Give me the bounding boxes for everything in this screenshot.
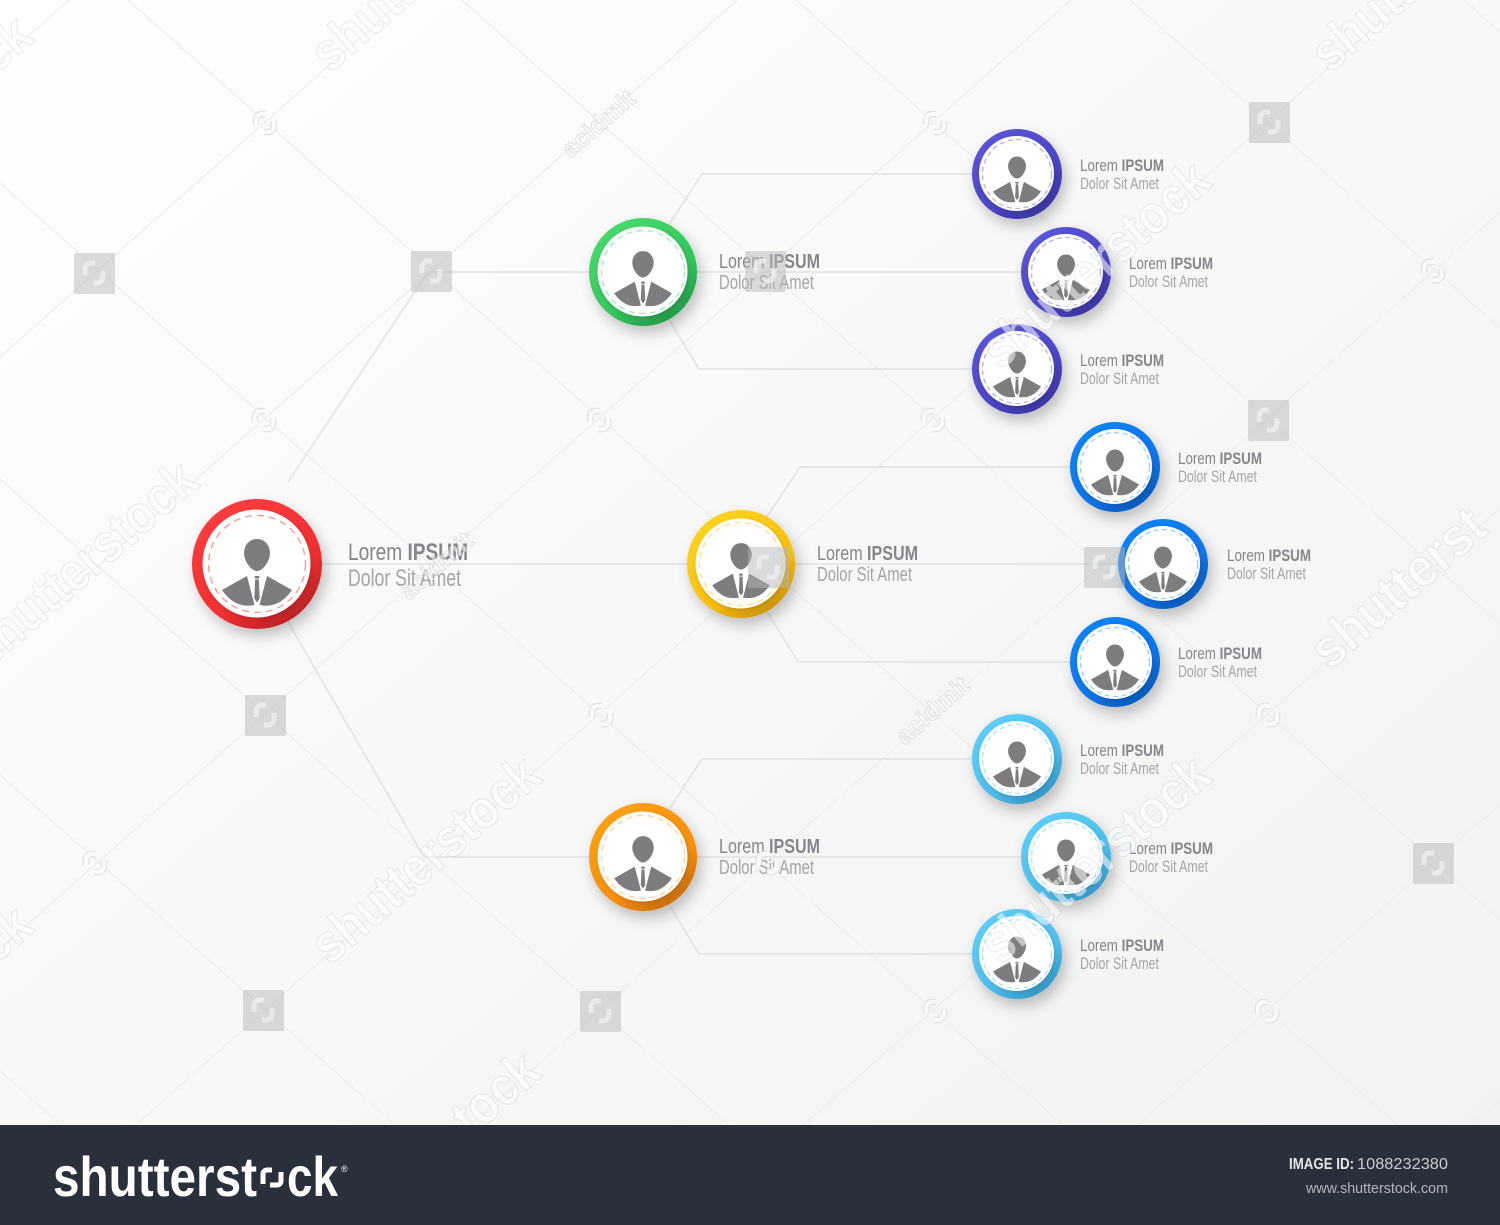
watermark overlay: acidmit bbox=[394, 526, 480, 605]
node: manager orange: Dolor Sit Amet bbox=[719, 857, 814, 879]
image id: IMAGE ID: bbox=[1289, 1156, 1354, 1173]
node: manager yellow bbox=[687, 510, 918, 618]
node: manager green bbox=[589, 218, 820, 326]
footer logo: shutterst bbox=[53, 1145, 257, 1208]
node: root bbox=[192, 499, 468, 629]
watermark overlay: acidmit bbox=[556, 84, 642, 163]
node: sky 2 bbox=[1021, 812, 1213, 902]
image id: 1088232380 bbox=[1357, 1156, 1448, 1173]
node: sky 1: Dolor Sit Amet bbox=[1080, 760, 1159, 778]
connector lines bbox=[288, 174, 1122, 954]
node: blue 2: Lorem IPSUM bbox=[1227, 547, 1311, 565]
node: manager green: Lorem IPSUM bbox=[719, 251, 820, 273]
watermark overlay: shutterstock bbox=[969, 743, 1222, 975]
node: purple 3: Lorem IPSUM bbox=[1080, 352, 1164, 370]
node: sky 2: Lorem IPSUM bbox=[1129, 840, 1213, 858]
footer logo: ® bbox=[341, 1164, 348, 1174]
node: manager yellow: Lorem IPSUM bbox=[817, 543, 918, 565]
node: sky 2: Dolor Sit Amet bbox=[1129, 858, 1208, 876]
node: purple 3: Dolor Sit Amet bbox=[1080, 370, 1159, 388]
node: blue 1: Lorem IPSUM bbox=[1178, 450, 1262, 468]
node: manager orange: Lorem IPSUM bbox=[719, 836, 820, 858]
node: purple 1: Dolor Sit Amet bbox=[1080, 175, 1159, 193]
watermark overlay: acidmit bbox=[890, 671, 976, 750]
watermark overlay: shutterstock bbox=[299, 743, 552, 975]
node: sky 1: Lorem IPSUM bbox=[1080, 742, 1164, 760]
node: purple 2: Dolor Sit Amet bbox=[1129, 273, 1208, 291]
node: purple 3 bbox=[972, 324, 1164, 414]
node: sky 1 bbox=[972, 714, 1164, 804]
node: blue 2 bbox=[1118, 519, 1311, 609]
node: root: Lorem IPSUM bbox=[348, 539, 468, 566]
website url: www.shutterstock.com bbox=[1305, 1181, 1448, 1197]
node: purple 1 bbox=[972, 129, 1164, 219]
node: root: Dolor Sit Amet bbox=[348, 565, 461, 592]
node: purple 1: Lorem IPSUM bbox=[1080, 157, 1164, 175]
node: blue 1: Dolor Sit Amet bbox=[1178, 468, 1257, 486]
node: purple 2 bbox=[1021, 227, 1213, 317]
node: blue 3 bbox=[1070, 617, 1262, 707]
node: manager orange bbox=[589, 803, 820, 911]
watermark overlay: shutterstock bbox=[969, 148, 1222, 380]
node: blue 3: Dolor Sit Amet bbox=[1178, 663, 1257, 681]
watermark overlay: tock bbox=[440, 1039, 551, 1147]
node: sky 3: Lorem IPSUM bbox=[1080, 937, 1164, 955]
node: manager green: Dolor Sit Amet bbox=[719, 272, 814, 294]
node: sky 3 bbox=[972, 909, 1164, 999]
node: blue 1 bbox=[1070, 422, 1262, 512]
footer logo: ck bbox=[287, 1145, 339, 1208]
node: manager yellow: Dolor Sit Amet bbox=[817, 564, 912, 586]
footer bar bbox=[0, 1125, 1500, 1225]
node: blue 2: Dolor Sit Amet bbox=[1227, 565, 1306, 583]
node: sky 3: Dolor Sit Amet bbox=[1080, 955, 1159, 973]
node: blue 3: Lorem IPSUM bbox=[1178, 645, 1262, 663]
image id bbox=[1289, 1156, 1448, 1173]
node: purple 2: Lorem IPSUM bbox=[1129, 255, 1213, 273]
